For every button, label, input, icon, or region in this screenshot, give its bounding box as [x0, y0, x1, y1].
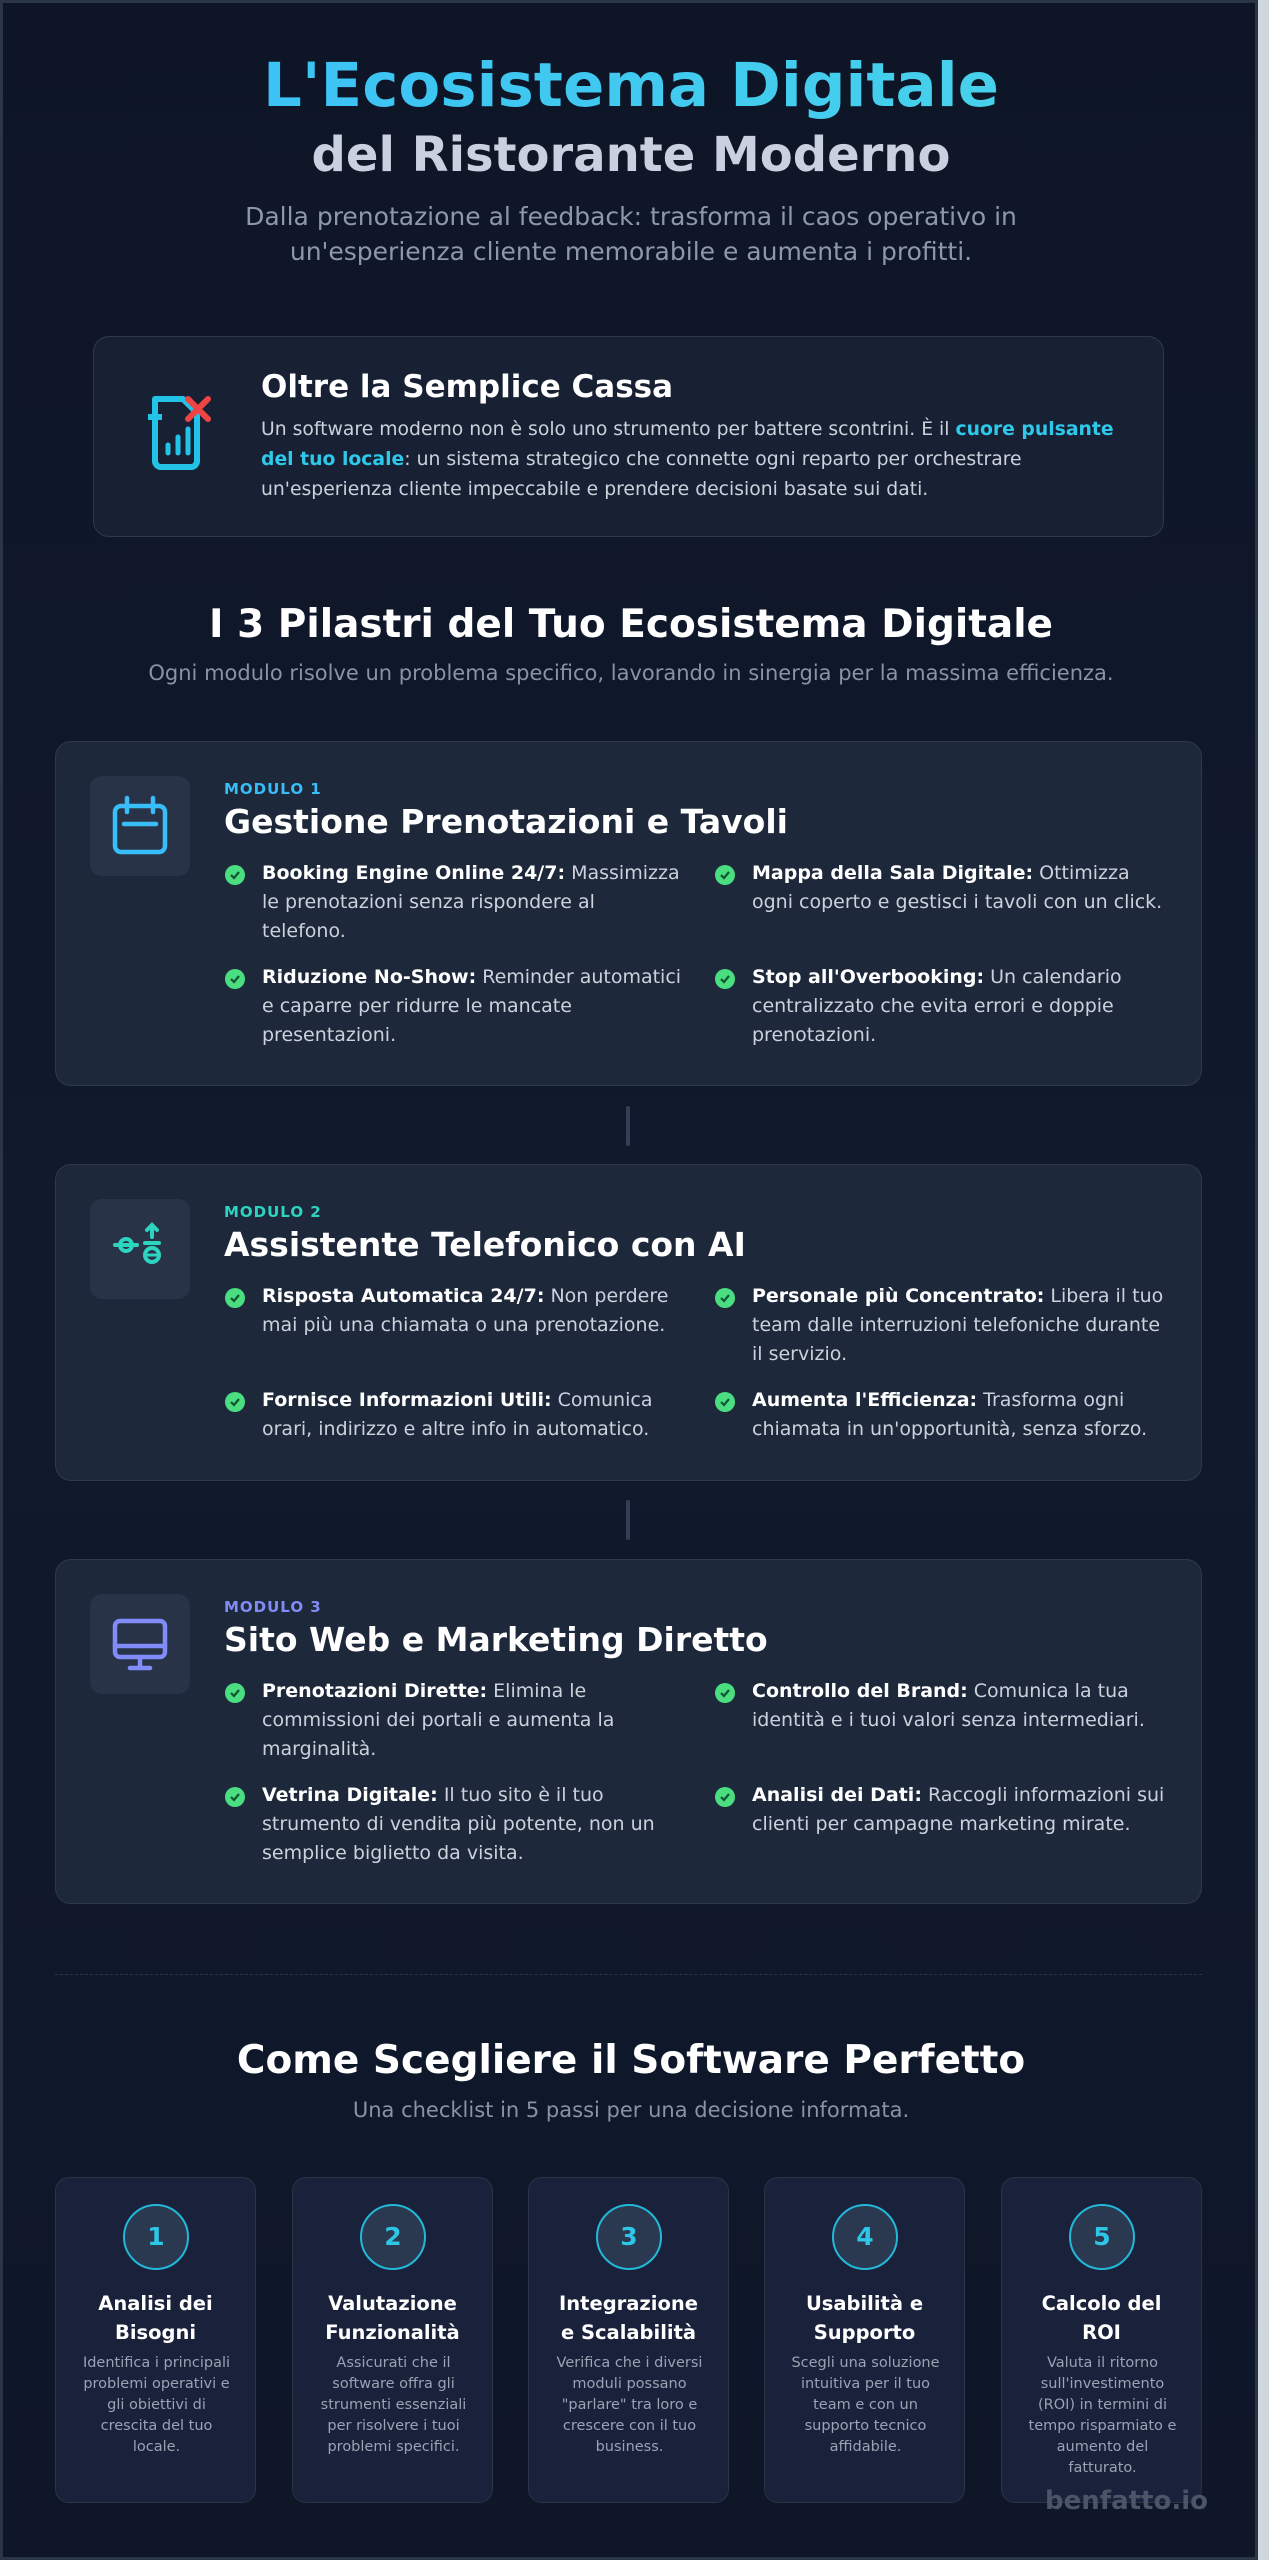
subheading: pillars: Ogni modulo risolve un problema specifico, lavorando in sinergia per la massima efficienza.	[148, 661, 1114, 685]
bullet: Mappa della Sala Digitale: Ottimizza ogni coperto e gestisci i tavoli con un click.	[752, 862, 1162, 913]
bullet: Aumenta l'Efficienza: Trasforma ogni chiamata in un'opportunità, senza sforzo.	[752, 1389, 1147, 1440]
step 3: 3	[620, 2222, 638, 2251]
step 2	[292, 2177, 493, 2503]
step 4: Supporto	[814, 2321, 915, 2344]
bullet: Booking Engine Online 24/7: Massimizza le prenotazioni senza rispondere al	[262, 862, 680, 913]
text: intro: Un software moderno non è solo uno strumento per battere scontrini. È il cuore pulsante del tuo locale: un sistema strategico che connette ogni reparto per orchestrare un'esperienza cliente impeccabile e prendere decisioni basate sui dati.	[261, 419, 1114, 500]
step 4	[764, 2177, 965, 2503]
step 5: 5	[1093, 2222, 1111, 2251]
step 1: Analisi dei	[98, 2292, 213, 2315]
step 2: Assicurati che il software offra gli strumenti essenziali per risolvere i tuoi problemi specifici.	[321, 2355, 466, 2455]
bullet: Vetrina Digitale: Il tuo sito è il tuo strumento di vendita più potente, non un semplice biglietto da visita.	[262, 1784, 655, 1864]
subtitle	[245, 202, 1017, 266]
step 3	[528, 2177, 729, 2503]
heading: intro: Oltre la Semplice Cassa	[261, 369, 673, 405]
panel: intro	[93, 336, 1164, 537]
step 4: 4	[856, 2222, 874, 2251]
step 4: Scegli una soluzione intuitiva per il tuo team e con un supporto tecnico affidabile.	[791, 2355, 940, 2455]
icon: receipt chart	[148, 396, 211, 470]
bullet	[225, 862, 680, 942]
heading: checklist: Come Scegliere il Software Perfetto	[237, 2038, 1025, 2083]
bullet: Personale più Concentrato: Libera il tuo team dalle interruzioni telefoniche durante il servizio.	[752, 1285, 1163, 1365]
label: MODULO 2	[224, 1203, 322, 1221]
connector	[626, 1106, 630, 1146]
bullet: Risposta Automatica 24/7: Non perdere mai più una chiamata o una prenotazione.	[262, 1285, 668, 1336]
panel: modulo 3	[55, 1559, 1202, 1904]
bullet: telefono.	[262, 920, 346, 942]
subheading: checklist: Una checklist in 5 passi per una decisione informata.	[353, 2098, 909, 2122]
bullet: Controllo del Brand: Comunica la tua identità e i tuoi valori senza intermediari.	[752, 1680, 1145, 1731]
step 1: Bisogni	[115, 2321, 196, 2344]
step 1	[55, 2177, 256, 2503]
heading: pillars: I 3 Pilastri del Tuo Ecosistema Digitale	[209, 602, 1053, 647]
step 1: 1	[147, 2222, 165, 2251]
panel: modulo 2	[55, 1164, 1202, 1481]
step 5	[1001, 2177, 1202, 2503]
title: L'Ecosistema Digitale	[263, 50, 999, 121]
subtitle: Dalla prenotazione al feedback: trasforma il caos operativo in	[245, 202, 1017, 231]
connector	[626, 1500, 630, 1540]
step 4: Usabilità e	[806, 2292, 923, 2315]
title	[263, 50, 999, 183]
step 2: 2	[384, 2222, 402, 2251]
subtitle: un'esperienza cliente memorabile e aumenta i profitti.	[290, 237, 972, 266]
bullet: Stop all'Overbooking: Un calendario centralizzato che evita errori e doppie prenotazioni.	[752, 966, 1122, 1046]
label: MODULO 3	[224, 1598, 322, 1616]
bullet: Riduzione No-Show: Reminder automatici e caparre per ridurre le mancate presentazioni.	[262, 966, 681, 1046]
step 3: e Scalabilità	[561, 2321, 696, 2344]
module title: Sito Web e Marketing Diretto	[224, 1620, 768, 1659]
bullet: Prenotazioni Dirette: Elimina le commissioni dei portali e aumenta la marginalità.	[262, 1680, 614, 1760]
step 5: Calcolo del	[1042, 2292, 1161, 2315]
title: del Ristorante Moderno	[312, 127, 950, 183]
bullet: Fornisce Informazioni Utili: Comunica orari, indirizzo e altre info in automatico.	[262, 1389, 652, 1440]
module title: Gestione Prenotazioni e Tavoli	[224, 802, 788, 841]
step 2: Valutazione	[328, 2292, 457, 2315]
step 2: Funzionalità	[325, 2321, 460, 2344]
step 5: Valuta il ritorno sull'investimento (ROI) in termini di tempo risparmiato e aumento del fatturato.	[1029, 2355, 1176, 2476]
step 1: Identifica i principali problemi operativi e gli obiettivi di crescita del tuo locale.	[83, 2355, 230, 2455]
panel: modulo 1	[55, 741, 1202, 1086]
icon: monitor	[90, 1594, 190, 1694]
step 5: ROI	[1082, 2321, 1121, 2344]
icon: calendar	[90, 776, 190, 876]
step 3: Integrazione	[559, 2292, 698, 2315]
watermark: benfatto.io	[1045, 2486, 1208, 2516]
label: MODULO 1	[224, 780, 322, 798]
icon: phone AI	[90, 1199, 190, 1299]
step 3: Verifica che i diversi moduli possano "parlare" tra loro e crescere con il tuo business.	[557, 2355, 702, 2455]
bullet: Analisi dei Dati: Raccogli informazioni sui clienti per campagne marketing mirate.	[752, 1784, 1164, 1835]
module title: Assistente Telefonico con AI	[224, 1225, 746, 1264]
